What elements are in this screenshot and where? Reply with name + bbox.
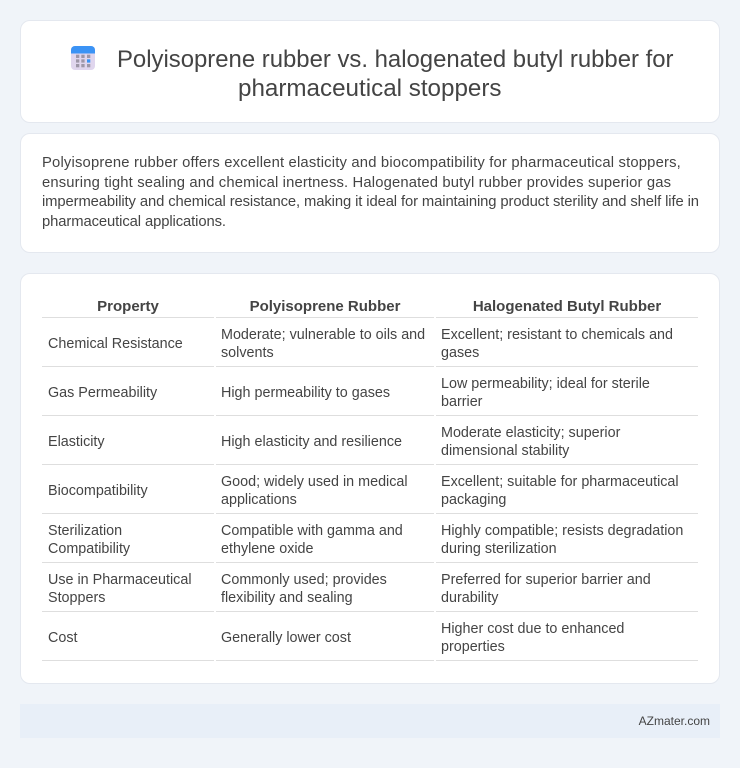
- row: cost: Cost: [48, 630, 78, 646]
- row: use in pharmaceutical stoppers: Preferred for superior barrier and: [441, 572, 651, 588]
- row: sterilization compatibility: Compatibility: [48, 541, 130, 557]
- row: chemical resistance: Moderate; vulnerable to oils and: [221, 327, 425, 343]
- row: use in pharmaceutical stoppers: [42, 572, 698, 612]
- row: chemical resistance: gases: [441, 345, 479, 361]
- row: chemical resistance: Excellent; resistant to chemicals and: [441, 327, 673, 343]
- row: gas permeability: Gas Permeability: [48, 385, 157, 401]
- row: use in pharmaceutical stoppers: flexibility and sealing: [221, 590, 353, 606]
- row: elasticity: dimensional stability: [441, 443, 569, 459]
- row: cost: Higher cost due to enhanced: [441, 621, 624, 637]
- row: use in pharmaceutical stoppers: Commonly used; provides: [221, 572, 387, 588]
- title: Polyisoprene rubber vs. halogenated butyl rubber for: [117, 46, 673, 73]
- column headers: Halogenated Butyl Rubber: [473, 298, 661, 315]
- row: gas permeability: barrier: [441, 394, 482, 410]
- row: elasticity: High elasticity and resilience: [221, 434, 402, 450]
- summary text: pharmaceutical applications.: [42, 214, 226, 230]
- row: use in pharmaceutical stoppers: durability: [441, 590, 498, 606]
- panel: comparison table card: [20, 273, 720, 684]
- row: sterilization compatibility: Highly compatible; resists degradation: [441, 523, 683, 539]
- row: biocompatibility: [42, 474, 698, 514]
- row: biocompatibility: Good; widely used in medical: [221, 474, 408, 490]
- row: chemical resistance: solvents: [221, 345, 274, 361]
- summary text: Polyisoprene rubber offers excellent elasticity and biocompatibility for pharmaceutical stoppers,: [42, 155, 681, 171]
- row: chemical resistance: [42, 327, 698, 367]
- row: sterilization compatibility: Compatible with gamma and: [221, 523, 403, 539]
- row: chemical resistance: Chemical Resistance: [48, 336, 183, 352]
- column headers: Polyisoprene Rubber: [250, 298, 400, 315]
- row: biocompatibility: applications: [221, 492, 297, 508]
- summary text: ensuring tight sealing and chemical inertness. Halogenated butyl rubber provides superior gas: [42, 175, 671, 191]
- row: sterilization compatibility: Sterilization: [48, 523, 122, 539]
- icon: calendar: [71, 46, 95, 70]
- panel: title card: [20, 20, 720, 123]
- row: biocompatibility: Excellent; suitable for pharmaceutical: [441, 474, 679, 490]
- row: cost: properties: [441, 639, 505, 655]
- footer credit: AZmater.com: [639, 714, 710, 728]
- column headers: [42, 298, 698, 318]
- row: cost: [42, 621, 698, 661]
- row: cost: Generally lower cost: [221, 630, 351, 646]
- row: sterilization compatibility: ethylene oxide: [221, 541, 314, 557]
- row: gas permeability: [42, 376, 698, 416]
- row: biocompatibility: packaging: [441, 492, 506, 508]
- row: elasticity: Elasticity: [48, 434, 105, 450]
- column headers: Property: [97, 298, 159, 315]
- summary text: [42, 155, 699, 230]
- row: biocompatibility: Biocompatibility: [48, 483, 148, 499]
- row: gas permeability: High permeability to gases: [221, 385, 390, 401]
- row: sterilization compatibility: [42, 523, 698, 563]
- row: gas permeability: Low permeability; ideal for sterile: [441, 376, 650, 392]
- row: use in pharmaceutical stoppers: Stoppers: [48, 590, 105, 606]
- panel: summary card: [20, 133, 720, 253]
- summary text: impermeability and chemical resistance, making it ideal for maintaining product sterility and shelf life in: [42, 194, 699, 210]
- row: elasticity: [42, 425, 698, 465]
- title: pharmaceutical stoppers: [238, 75, 502, 102]
- footer bar: [20, 704, 720, 738]
- row: sterilization compatibility: during sterilization: [441, 541, 557, 557]
- title: [117, 46, 674, 102]
- row: use in pharmaceutical stoppers: Use in Pharmaceutical: [48, 572, 192, 588]
- row: elasticity: Moderate elasticity; superior: [441, 425, 620, 441]
